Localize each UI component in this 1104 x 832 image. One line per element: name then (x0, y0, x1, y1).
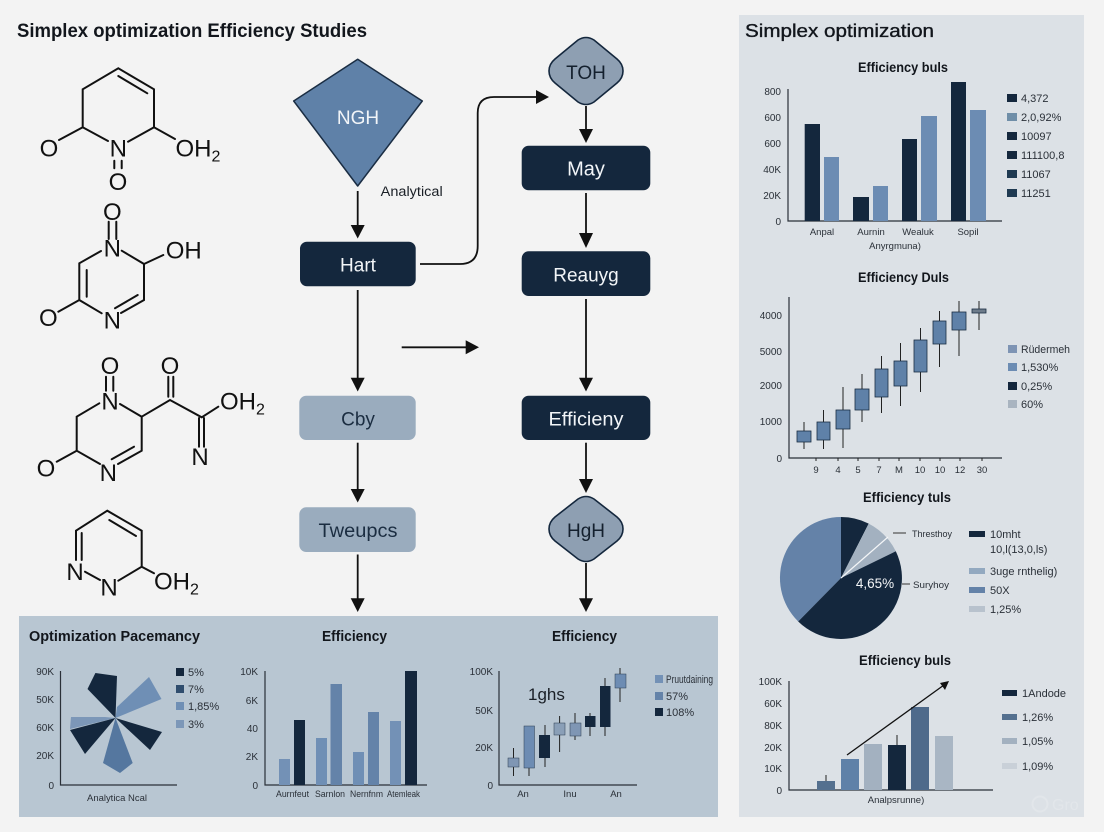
polar chart: 0 (48, 781, 54, 792)
legend: polar chart: 3% (188, 719, 204, 731)
candlestick chart: right (470, 667, 637, 800)
decision: NGH: NGH (337, 108, 379, 129)
candlestick chart: sidebar: 9 (813, 465, 819, 476)
bar chart: sidebar top: Wealuk (902, 227, 934, 238)
decision: TOH (549, 38, 623, 104)
molecule 2: N (104, 236, 121, 263)
legend: sidebar top: 10097 (1021, 131, 1052, 143)
chart title 2: Efficiency Duls (858, 269, 949, 285)
candlestick chart: sidebar: 10 (915, 465, 925, 476)
bar chart: sidebar bottom with trend arrow: 100K (759, 677, 782, 688)
chart title 4: Efficiency buls (859, 652, 951, 668)
step: Efficieny (522, 396, 650, 440)
molecule 2 (39, 199, 202, 334)
candlestick chart: right: 20K (475, 743, 493, 754)
candlestick chart: sidebar: 0 (776, 454, 782, 465)
legend: sidebar top (1007, 93, 1064, 200)
panel: optimization performance (19, 616, 718, 817)
legend: polar chart: 7% (188, 684, 204, 696)
legend: sidebar top: 11067 (1021, 169, 1051, 181)
watermark (1032, 796, 1079, 814)
legend: sidebar bottom: 1,05% (1022, 736, 1053, 748)
legend: sidebar candlestick: 60% (1021, 399, 1043, 411)
legend: pie: 3uge rnthelig) (990, 566, 1057, 578)
candlestick chart: sidebar: M (895, 465, 903, 476)
bar chart: sidebar top: Sopil (957, 227, 979, 238)
legend: polar chart: 1,85% (188, 701, 219, 713)
step: Hart (300, 242, 416, 286)
candlestick chart: sidebar: 30 (977, 465, 987, 476)
legend: candlestick: 108% (666, 707, 694, 719)
legend: sidebar top: 11251 (1021, 188, 1051, 200)
candlestick chart: right: 0 (487, 781, 493, 792)
legend: sidebar top: 4,372 (1021, 93, 1049, 105)
molecule 3: O (161, 353, 179, 380)
legend: candlestick: 57% (666, 691, 688, 703)
molecule 3: N (100, 460, 117, 487)
heading: Simplex optimization: Simplex optimization (745, 21, 934, 41)
pie chart: 4,65% (856, 576, 894, 591)
legend: sidebar candlestick: 0,25% (1021, 381, 1052, 393)
legend: pie: 1,25% (990, 604, 1021, 616)
bar chart: sidebar bottom with trend arrow (759, 677, 993, 806)
step: Efficieny: Efficieny (548, 410, 624, 430)
candlestick chart: sidebar: 10 (935, 465, 945, 476)
bar chart: sidebar top (763, 82, 1002, 252)
molecule 4: N (66, 559, 84, 586)
candlestick chart: right: 50K (475, 706, 493, 717)
candlestick chart: sidebar: 7 (876, 465, 882, 476)
arrow: Cby to Tweupcs (351, 443, 365, 502)
decision: HgH: HgH (567, 521, 605, 542)
arrow: Efficieny to HgH (579, 443, 593, 493)
candlestick chart: right: 1ghs (528, 685, 565, 704)
bar chart: sidebar top: 800 (764, 87, 781, 98)
bar chart: middle: 2K (246, 752, 258, 763)
arrow: Hart to Cby (351, 290, 365, 392)
legend: pie: 10mht (990, 529, 1021, 541)
candlestick chart: right: Inu (563, 789, 577, 800)
legend: pie: 50X (990, 585, 1010, 597)
candlestick chart: sidebar (760, 297, 1002, 476)
bar chart: sidebar top: 600 (764, 139, 781, 150)
legend: sidebar bottom: 1,09% (1022, 761, 1053, 773)
bar chart: middle: 6K (246, 696, 258, 707)
label: Analytical: Analytical (381, 184, 443, 199)
candlestick chart: sidebar: 4000 (760, 311, 782, 322)
bar chart: sidebar top: Anyrgmuna) (869, 241, 921, 252)
step: Tweupcs: Tweupcs (318, 521, 398, 542)
bar chart: sidebar bottom with trend arrow: Analpsrunne) (868, 795, 924, 806)
legend: sidebar candlestick (1008, 344, 1070, 411)
molecule 4: N (100, 575, 118, 602)
heading: Efficiency middle: Efficiency (322, 629, 387, 645)
pie chart (780, 517, 952, 639)
candlestick chart: right: 100K (470, 667, 493, 678)
bar chart: sidebar bottom with trend arrow: 20K (764, 743, 782, 754)
legend: pie (969, 529, 1057, 616)
bar chart: middle: Aurnfeut (276, 789, 309, 800)
molecule 2: O (39, 305, 58, 332)
pie chart: Suryhoy (913, 580, 949, 591)
arrow: Hart to TOH (420, 90, 549, 264)
molecule 2: OH (166, 237, 202, 264)
heading: Optimization Pacemancy: Optimization Pacemancy (29, 629, 200, 645)
legend: polar chart: 5% (188, 667, 204, 679)
molecule 3: O (101, 353, 119, 380)
pie chart: Thresthoy (912, 529, 952, 540)
molecule 3: N (191, 444, 209, 471)
legend: sidebar top: 111100,8 (1021, 150, 1064, 162)
watermark: Gro (1052, 797, 1079, 814)
legend: sidebar candlestick: Rüdermeh (1021, 344, 1070, 356)
bar chart: middle: Sarnlon (315, 789, 345, 800)
step: Tweupcs (299, 507, 416, 552)
arrow: HgH down (579, 563, 593, 612)
legend: sidebar top: 2,0,92% (1021, 112, 1062, 124)
polar chart: 90K (36, 667, 54, 678)
molecule 3: N (101, 388, 119, 415)
candlestick chart: sidebar: 5000 (760, 347, 782, 358)
step: Reauyg (522, 251, 650, 296)
legend: polar chart (176, 667, 219, 731)
chart title 3: Efficiency tuls (863, 489, 951, 505)
bar chart: sidebar top: Anpal (810, 227, 834, 238)
molecule 1 (40, 68, 220, 196)
step: May: May (567, 158, 605, 180)
molecule 1: OH (176, 136, 212, 163)
step: Reauyg: Reauyg (553, 266, 619, 286)
candlestick chart: right: An (517, 789, 529, 800)
bar chart: sidebar bottom with trend arrow: 60K (764, 699, 782, 710)
legend: candlestick (655, 674, 713, 719)
polar chart (36, 667, 177, 804)
molecule 3: O (37, 456, 55, 483)
bar chart: middle: Atemleak (387, 789, 420, 800)
bar chart: sidebar top: 40K (763, 165, 781, 176)
legend: sidebar bottom: 1,26% (1022, 712, 1053, 724)
legend: sidebar candlestick: 1,530% (1021, 362, 1059, 374)
molecule 2: N (104, 307, 121, 334)
bar chart: sidebar bottom with trend arrow: 0 (776, 786, 782, 797)
legend: sidebar bottom (1002, 688, 1066, 773)
legend: candlestick: Pruutdaining (666, 674, 713, 686)
decision: HgH (549, 496, 623, 562)
candlestick chart: sidebar: 1000 (760, 417, 782, 428)
bar chart: middle: Nernfnm (350, 789, 383, 800)
step: Hart: Hart (340, 256, 377, 276)
polar chart: 50K (36, 695, 54, 706)
bar chart: sidebar top: 20K (763, 191, 781, 202)
molecule 1: 2 (212, 149, 220, 166)
polar chart: 60K (36, 723, 54, 734)
molecule 4: 2 (190, 581, 199, 598)
legend: pie: 10,l(13,0,ls) (990, 544, 1047, 556)
heading: Efficiency right: Efficiency (552, 629, 617, 645)
molecule 1: N (110, 136, 127, 163)
legend: sidebar bottom: 1Andode (1022, 688, 1066, 700)
panel: simplex optimization sidebar (739, 15, 1084, 817)
bar chart: sidebar bottom with trend arrow: 80K (764, 721, 782, 732)
arrow: Reauyg to Efficieny (579, 299, 593, 392)
polar chart: 20K (36, 751, 54, 762)
bar chart: middle: 10K (240, 667, 258, 678)
decision: NGH (294, 59, 422, 186)
candlestick chart: sidebar: 12 (955, 465, 965, 476)
step: May (522, 146, 650, 190)
chart title 1: Efficiency buls (858, 59, 948, 75)
bar chart: middle (240, 667, 427, 800)
bar chart: sidebar top: Aurnin (857, 227, 885, 238)
molecule 4: OH (154, 568, 190, 595)
molecule 3 (37, 353, 265, 487)
candlestick chart: right: An (610, 789, 622, 800)
molecule 2: O (103, 199, 122, 226)
bar chart: middle: 40 (247, 724, 258, 735)
bar chart: middle: 0 (252, 781, 258, 792)
candlestick chart: sidebar: 4 (835, 465, 841, 476)
arrow: horizontal (402, 340, 479, 354)
candlestick chart: sidebar: 5 (855, 465, 861, 476)
molecule 3: OH (220, 388, 256, 415)
title: Simplex optimization Efficiency Studies (17, 21, 367, 42)
step: Cby (299, 396, 416, 440)
bar chart: sidebar top: 600 (764, 113, 781, 124)
molecule 3: 2 (256, 401, 265, 418)
polar chart: Analytica Ncal (87, 793, 147, 804)
arrow: NGH to Hart (351, 191, 365, 238)
molecule 1: O (40, 136, 58, 163)
bar chart: sidebar top: 0 (775, 217, 781, 228)
step: Cby: Cby (341, 410, 375, 430)
candlestick chart: sidebar: 2000 (760, 381, 782, 392)
bar chart: sidebar bottom with trend arrow: 10K (764, 764, 782, 775)
molecule 1: O (109, 169, 127, 196)
arrow: May to Reauyg (579, 193, 593, 248)
molecule 4 (66, 511, 199, 602)
decision: TOH: TOH (566, 63, 606, 84)
arrow: TOH to May (579, 106, 593, 143)
flowchart (294, 38, 650, 612)
arrow: Tweupcs down (351, 554, 365, 612)
